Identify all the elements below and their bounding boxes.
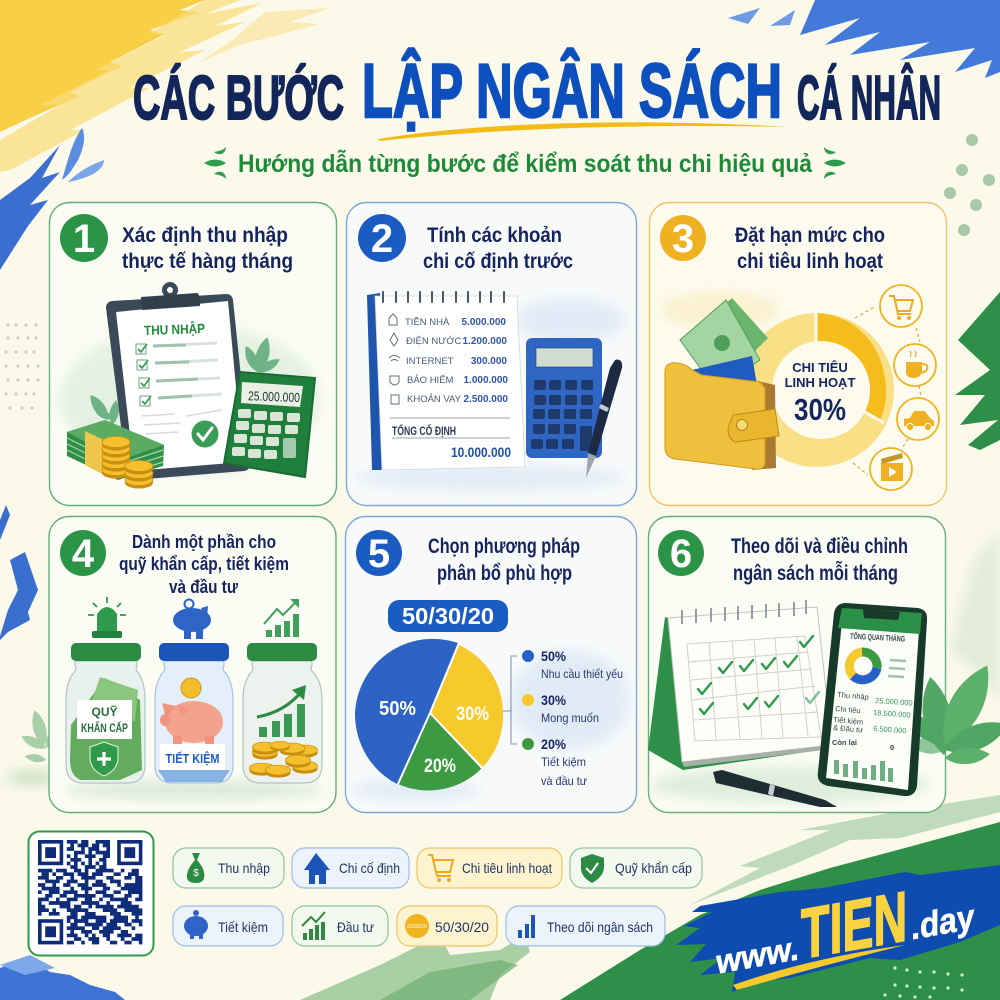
notebook: 300.000 — [471, 356, 507, 367]
heading 1 — [122, 224, 293, 273]
heading 2 — [423, 224, 573, 273]
panel: step 3 flexible spending — [650, 202, 946, 506]
notebook: 2.500.000 — [464, 394, 508, 405]
calculator: fixed costs — [526, 338, 602, 458]
desk calendar — [648, 600, 832, 770]
chip: 50/30/20: 50/30/20 — [407, 924, 427, 930]
calculator: income — [224, 372, 315, 477]
bottom right dots — [883, 966, 964, 999]
panel: step 5 allocation method — [346, 516, 636, 812]
heading 3: chi tiêu linh hoạt — [737, 250, 883, 273]
wash — [65, 780, 325, 800]
jar: emergency fund: QUỸ — [91, 704, 118, 719]
website banner — [676, 864, 1000, 992]
pen — [586, 359, 622, 478]
legend: 50% — [541, 648, 566, 664]
title: LẬP NGÂN SÁCH — [362, 48, 782, 134]
clipboard: THU NHẬP — [144, 321, 205, 338]
wallet with cash — [665, 298, 779, 470]
heading 3: Đặt hạn mức cho — [735, 224, 885, 247]
chip: Đầu tư — [292, 906, 388, 946]
website banner: www. — [715, 930, 799, 982]
badge 2 — [358, 214, 406, 262]
chip: Đầu tư: Đầu tư — [337, 919, 374, 935]
heading 3 — [735, 224, 885, 273]
chip: Theo dõi ngân sách — [506, 906, 665, 946]
notebook — [367, 292, 525, 470]
heading 2: chi cố định trước — [423, 250, 573, 273]
panel: step 6 monitor budget — [648, 516, 1000, 812]
pie chart: 50% — [379, 698, 416, 720]
icon: plant leaves — [901, 658, 1000, 766]
chip: Thu nhập: $ — [193, 868, 199, 879]
legend: Tiết kiệm — [541, 755, 586, 769]
badge 6 — [658, 530, 704, 576]
heading 4: quỹ khẩn cấp, tiết kiệm — [119, 553, 289, 574]
heading 2: Tính các khoản — [427, 224, 562, 247]
title underline — [378, 122, 790, 141]
clipboard — [106, 282, 250, 480]
badge 4 — [60, 530, 106, 576]
panel: step 1 income — [50, 202, 336, 506]
chip: Chi cố định: Chi cố định — [339, 860, 400, 876]
icon: growth chart — [264, 599, 299, 637]
legend: Mong muốn — [541, 711, 599, 725]
notebook: 1.200.000 — [462, 336, 507, 347]
badge 4: 4 — [72, 532, 95, 576]
QR code — [28, 832, 154, 956]
icon: leaves — [86, 336, 282, 426]
badge 1: 1 — [73, 217, 95, 261]
chip: Chi tiêu linh hoạt — [417, 848, 562, 888]
pen: desk — [713, 770, 837, 807]
left decorative dots — [4, 323, 40, 410]
notebook: 5.000.000 — [462, 317, 506, 328]
title: CÁC BƯỚC — [133, 64, 344, 133]
pie chart — [355, 639, 503, 790]
calculator: income: 25.000.000 — [248, 388, 300, 405]
jar: savings: TIẾT KIỆM — [166, 751, 220, 766]
phone dashboard: 25.000.000 — [875, 696, 913, 708]
legend: và đầu tư — [541, 774, 587, 788]
heading 4 — [119, 531, 289, 597]
panel: step 2 fixed costs — [346, 202, 636, 506]
donut chart: LINH HOẠT — [785, 375, 855, 390]
phone dashboard: Tiết kiệm — [833, 715, 864, 727]
badge 5: 5 — [368, 532, 390, 576]
phone dashboard: & Đầu tư — [833, 723, 864, 735]
website banner: TIEN — [801, 876, 907, 974]
notebook: TIỀN NHÀ — [405, 317, 450, 328]
method badge: 50/30/20 — [402, 603, 494, 629]
legend: 30% — [541, 692, 566, 708]
badge 3 — [660, 215, 706, 261]
right decorative dots — [923, 134, 995, 298]
chip: Tiết kiệm: Tiết kiệm — [218, 919, 268, 935]
donut chart: 30% — [794, 392, 846, 427]
icon: left pale leaves — [6, 709, 59, 786]
legend: 20% — [541, 736, 566, 752]
notebook: INTERNET — [406, 356, 454, 367]
pie chart: 30% — [456, 704, 489, 725]
chip: Theo dõi ngân sách: Theo dõi ngân sách — [547, 919, 653, 935]
notebook: ĐIỆN NƯỚC — [406, 336, 461, 347]
chip: Chi cố định — [292, 848, 409, 888]
jar: savings — [155, 643, 233, 783]
method badge — [388, 600, 508, 632]
chip: Thu nhập: Thu nhập — [218, 860, 270, 876]
phone dashboard: Thu nhập — [837, 690, 869, 702]
phone dashboard: TỔNG QUAN THÁNG — [850, 632, 905, 644]
heading 6: ngân sách mỗi tháng — [733, 561, 898, 585]
panel: step 4 savings jars — [49, 516, 336, 812]
badge 5 — [356, 530, 402, 576]
chip: 50/30/20: 50/30/20 — [435, 919, 489, 935]
heading 4: và đầu tư — [169, 576, 238, 597]
notebook: TỔNG CỐ ĐỊNH — [392, 424, 456, 438]
badge 2: 2 — [371, 217, 393, 261]
chip: Chi tiêu linh hoạt: Chi tiêu linh hoạt — [462, 860, 552, 876]
legend: Nhu cầu thiết yếu — [541, 667, 623, 681]
website banner: .day — [911, 897, 975, 948]
phone dashboard: 6.500.000 — [873, 724, 907, 735]
coins — [102, 436, 153, 488]
wash — [350, 650, 630, 800]
donut chart — [740, 313, 894, 467]
wash — [650, 767, 930, 803]
heading 5: phân bổ phù hợp — [437, 562, 572, 585]
heading 4: Dành một phần cho — [132, 531, 276, 552]
chip: Thu nhập — [173, 848, 284, 888]
chip: Tiết kiệm — [173, 906, 283, 946]
heading 5 — [428, 535, 580, 585]
phone dashboard: Còn lại — [832, 738, 857, 747]
notebook: BẢO HIỂM — [407, 374, 454, 386]
badge 6: 6 — [670, 532, 692, 576]
badge 1 — [60, 214, 108, 262]
money stack — [67, 420, 164, 480]
jar: emergency fund: KHẨN CẤP — [81, 722, 128, 735]
heading 6: Theo dõi và điều chỉnh — [731, 535, 908, 558]
phone dashboard: 18.500.000 — [873, 708, 911, 720]
pie chart: 20% — [424, 756, 456, 777]
phone dashboard: Chi tiêu — [835, 704, 861, 715]
heading 5: Chọn phương pháp — [428, 535, 580, 558]
icon: blue piggy — [173, 600, 211, 639]
notebook: 10.000.000 — [451, 444, 511, 460]
jar: investment — [243, 643, 322, 783]
wash — [355, 298, 625, 490]
title — [133, 48, 941, 134]
chip: Quỹ khẩn cấp — [570, 848, 702, 888]
icon: siren — [88, 597, 126, 638]
heading 1: Xác định thu nhập — [122, 224, 288, 247]
wash — [660, 292, 780, 328]
keyword chips — [173, 848, 702, 946]
phone dashboard: 0 — [890, 743, 894, 752]
subtitle: Hướng dẫn từng bước để kiểm soát thu chi hiệu quả — [238, 148, 813, 178]
notebook: 1.000.000 — [464, 375, 508, 386]
heading 6 — [731, 535, 908, 585]
chip: 50/30/20 — [397, 906, 497, 946]
legend — [503, 648, 623, 788]
heading 1: thực tế hàng tháng — [122, 250, 293, 273]
phone dashboard — [818, 603, 927, 796]
icons: spending categories — [853, 285, 939, 490]
badge 3: 3 — [672, 217, 694, 261]
donut chart: CHI TIÊU — [792, 360, 848, 375]
jar: emergency fund — [66, 643, 145, 783]
notebook: KHOẢN VAY — [407, 393, 462, 405]
chip: Quỹ khẩn cấp: Quỹ khẩn cấp — [615, 860, 692, 876]
wash — [60, 325, 320, 475]
